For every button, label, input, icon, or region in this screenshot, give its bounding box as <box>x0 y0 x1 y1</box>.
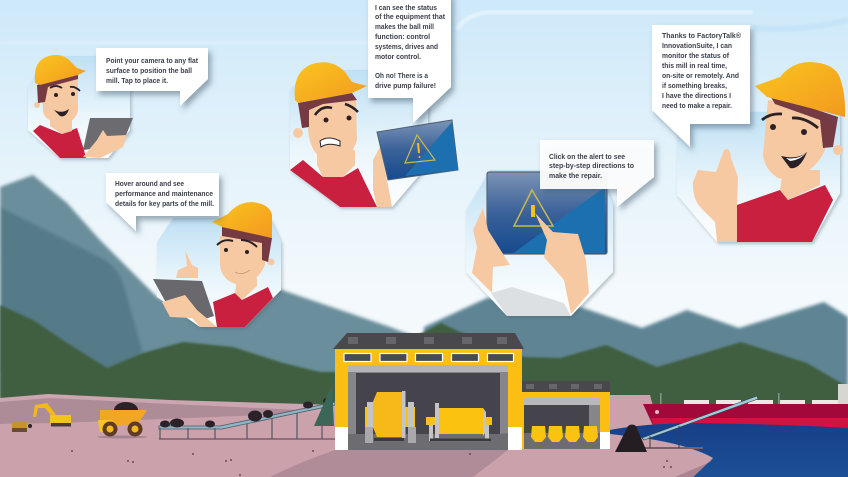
speech bubble: equipment status: Oh no! There is a <box>375 71 429 80</box>
speech bubble: FactoryTalk: Thanks to FactoryTalk® <box>662 31 741 40</box>
character panel: worried worker <box>290 62 458 207</box>
hair <box>222 226 272 262</box>
pointing finger <box>176 250 198 278</box>
card <box>157 218 281 327</box>
speech bubble: hover <box>106 173 219 231</box>
dump truck <box>97 402 147 438</box>
neck <box>780 170 820 200</box>
card <box>290 70 428 207</box>
mountains <box>0 175 848 400</box>
hair <box>769 94 838 148</box>
speech bubble: click alert: Click on the alert to see <box>549 152 625 161</box>
shirt <box>737 185 833 242</box>
shirt <box>290 160 377 207</box>
hand <box>373 147 392 207</box>
hand <box>83 130 127 158</box>
ground <box>0 394 713 477</box>
ground shadow <box>491 287 571 316</box>
ear <box>833 145 843 155</box>
right hand <box>535 213 589 314</box>
eyes and smile <box>50 86 80 116</box>
speech bubble: camera: surface to position the ball <box>106 66 192 75</box>
tree <box>314 385 334 426</box>
speech bubble: camera <box>96 48 208 106</box>
speech bubble: FactoryTalk: this mill in real time, <box>662 61 727 70</box>
speech bubble: click alert <box>540 140 654 207</box>
speech bubble: FactoryTalk: if something breaks, <box>662 81 727 90</box>
speech bubble: FactoryTalk: need to make a repair. <box>662 101 732 110</box>
card <box>28 56 130 158</box>
speech bubble: equipment status <box>368 0 451 123</box>
speech bubble: hover: Hover around and see <box>115 179 184 188</box>
speech bubble: equipment status: drive pump failure! <box>375 81 436 90</box>
excavator <box>28 403 71 428</box>
neck <box>235 278 257 300</box>
speech bubble: equipment status: motor control. <box>375 52 421 61</box>
hat <box>35 55 86 85</box>
speech bubble: FactoryTalk: monitor the status of <box>662 51 729 60</box>
hat <box>755 62 845 117</box>
character panel: hands on tablet <box>466 170 613 316</box>
small loader <box>12 422 27 432</box>
side building <box>522 381 610 449</box>
face <box>220 236 265 285</box>
ball mill 1 <box>365 391 416 443</box>
speech bubble: equipment status: makes the ball mill <box>375 22 434 31</box>
hair <box>37 74 78 103</box>
face <box>763 100 825 180</box>
shirt <box>33 125 86 158</box>
hat <box>295 62 367 103</box>
hat <box>212 202 272 238</box>
ear <box>34 102 40 108</box>
ball mill 2 <box>426 403 492 441</box>
hand <box>162 295 217 327</box>
speech bubble: FactoryTalk: I have the directions I <box>662 91 731 100</box>
eyes and eyebrows <box>217 240 257 274</box>
character panel: thumbs-up worker <box>677 62 845 242</box>
forest <box>0 305 848 410</box>
neck <box>317 150 355 177</box>
neck <box>50 118 72 134</box>
thumbs-up hand <box>693 149 738 242</box>
hair <box>298 93 357 128</box>
speech bubble: equipment status: systems, drives and <box>375 42 438 51</box>
face <box>308 99 357 157</box>
main mill building <box>333 333 524 450</box>
speech bubble: equipment status: of the equipment that <box>375 12 445 21</box>
eyes and smile <box>762 114 818 168</box>
speech bubble: equipment status: I can see the status <box>375 3 437 12</box>
tablet <box>153 279 214 320</box>
hoppers <box>531 426 598 442</box>
ship <box>643 384 848 430</box>
water <box>610 423 848 477</box>
left conveyor <box>159 398 335 439</box>
speech bubble: FactoryTalk <box>652 25 750 147</box>
speech bubble: hover: details for key parts of the mill. <box>115 199 214 208</box>
character panel: pointing worker <box>153 202 281 327</box>
face <box>42 75 78 124</box>
speech bubble: hover: performance and maintenance <box>115 189 213 198</box>
speech bubble: FactoryTalk: on-site or remotely. And <box>662 71 739 80</box>
shirt <box>213 287 273 327</box>
ear <box>293 128 303 138</box>
left hand <box>472 208 510 293</box>
speech bubble: camera: mill. Tap to place it. <box>106 76 168 85</box>
speech bubble: FactoryTalk: InnovationSuite, I can <box>662 41 732 50</box>
speech bubble: click alert: step-by-step directions to <box>549 161 634 170</box>
worried eyes and mouth <box>315 104 358 147</box>
speech bubble: camera: Point your camera to any flat <box>106 56 198 65</box>
character panel: tablet worker, top left <box>28 55 133 158</box>
dock edge <box>675 458 713 477</box>
speech bubble: click alert: make the repair. <box>549 171 602 180</box>
card <box>677 112 840 242</box>
speech bubble: equipment status: function: control <box>375 32 430 41</box>
clouds <box>0 12 848 43</box>
coal pile and port conveyor <box>615 396 758 452</box>
tablet <box>83 118 133 150</box>
tablet <box>487 172 607 254</box>
tablet with alert <box>377 120 458 180</box>
card <box>466 170 613 316</box>
ear <box>268 258 274 266</box>
